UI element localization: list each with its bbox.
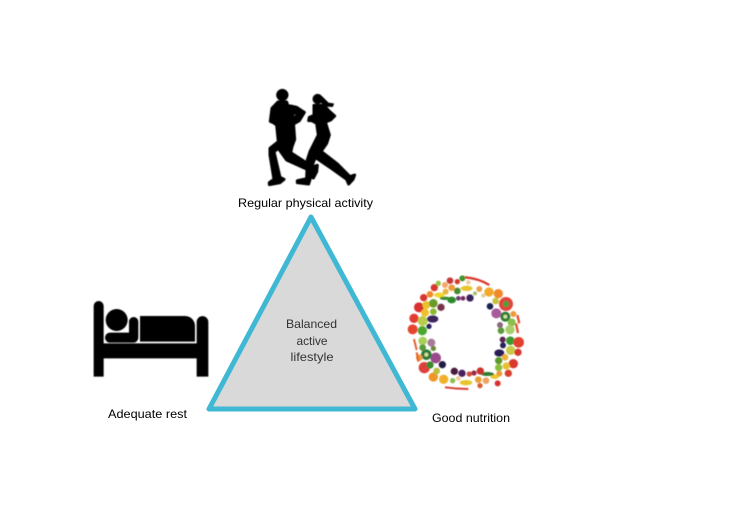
center text: Balanced active lifestyle (286, 317, 337, 364)
center text: Balanced active lifestyle: lifestyle (290, 350, 334, 364)
center text: Balanced active lifestyle: active (296, 334, 328, 348)
label: Regular physical activity: Regular physical activity (238, 196, 373, 210)
center text: Balanced active lifestyle: Balanced (286, 317, 337, 331)
label: Good nutrition: Good nutrition (432, 411, 510, 425)
icon: person in bed (94, 301, 208, 377)
icon: runners silhouette (269, 89, 355, 185)
label: Adequate rest: Adequate rest (108, 407, 188, 421)
icon: ring of fruits and vegetables (408, 275, 524, 389)
triangle: balanced active lifestyle (209, 217, 415, 409)
